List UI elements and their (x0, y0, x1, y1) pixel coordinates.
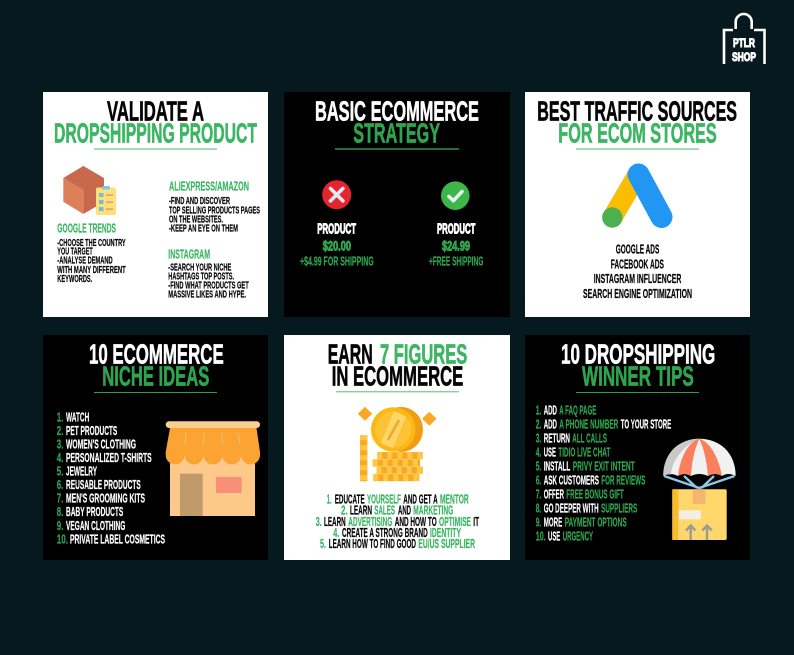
list: seven figure steps: LEARN HOW TO FIND GOOD (329, 536, 416, 551)
list: niche ideas: 6. (57, 477, 63, 492)
heading: 7 figures: IN ECOMMERCE (332, 361, 463, 392)
panel: basic ecommerce strategy (284, 92, 510, 317)
heading: niche ideas (89, 339, 224, 393)
list: winner tips: 8. (536, 501, 541, 516)
list: seven figure steps: AND GET A (403, 491, 438, 506)
logo: PTLR Shop: SHOP (732, 50, 756, 64)
list: winner tips: A FAQ PAGE (559, 403, 596, 418)
list: winner tips: ASK CUSTOMERS (544, 473, 599, 488)
list: winner tips: SUPPLIERS (601, 501, 637, 516)
list: winner tips: PAYMENT OPTIONS (565, 515, 627, 530)
icon: google ads logo (602, 174, 662, 228)
list: seven figure steps: ADVERTISING (348, 514, 392, 529)
text block: instagram: HASHTAGS TOP POSTS. (168, 271, 234, 282)
list: winner tips: OFFER (544, 487, 564, 502)
list: winner tips: ALL CALLS (572, 431, 607, 446)
list: seven figure steps: IDENTITY (430, 525, 461, 540)
offer: product at 20.00: $20.00 (323, 238, 351, 254)
list: niche ideas: 8. (57, 504, 63, 519)
offer: product at 24.99: PRODUCT (437, 222, 475, 238)
heading: traffic sources (537, 96, 737, 150)
heading: 7 figures: EARN (328, 339, 373, 370)
logo: PTLR Shop: PTLR (733, 36, 755, 50)
heading: strategy (315, 96, 479, 150)
heading: validate: DROPSHIPPING PRODUCT (54, 117, 257, 148)
list: niche ideas: MEN'S GROOMING KITS (66, 491, 145, 506)
list: seven figure steps: 1. (327, 491, 332, 506)
panel: earn 7 figures (284, 335, 510, 560)
offer: product at 20.00: +$4.99 FOR SHIPPING (300, 255, 374, 269)
list: niche ideas: 2. (57, 423, 63, 438)
text block: aliexpress amazon: ALIEXPRESS/AMAZON (169, 180, 249, 194)
panel: 10 ecommerce niche ideas (43, 335, 268, 560)
list: winner tips: PRIVY EXIT INTENT (573, 459, 635, 474)
list: niche ideas: 10. (57, 531, 68, 546)
list: niche ideas: JEWELRY (66, 464, 97, 478)
list: niche ideas: 1. (57, 409, 63, 424)
list: traffic sources (583, 242, 692, 301)
heading: validate: VALIDATE A (107, 96, 204, 127)
list: winner tips: 3. (536, 431, 541, 446)
list: winner tips (536, 403, 671, 544)
text block: instagram: INSTAGRAM (168, 247, 210, 261)
heading: strategy: STRATEGY (353, 118, 440, 149)
list: seven figure steps: EDUCATE (335, 491, 365, 506)
icon: shop (166, 421, 260, 516)
offer: product at 24.99 (429, 222, 483, 269)
text block: aliexpress amazon: TOP SELLING PRODUCTS PAGES (169, 205, 260, 216)
list: seven figure steps: 2. (341, 503, 348, 518)
list: winner tips: USE (548, 529, 560, 544)
list: seven figure steps: OPTIMISE (439, 514, 471, 529)
text block: aliexpress amazon: ON THE WEBSITES. (169, 214, 223, 225)
list: seven figure steps: AND HOW TO (395, 514, 437, 529)
list: seven figure steps: MARKETING (413, 503, 453, 518)
list: niche ideas: WATCH (66, 409, 89, 424)
list: seven figure steps: 3. (316, 514, 322, 529)
list: niche ideas: PRIVATE LABEL COSMETICS (70, 531, 165, 546)
list: winner tips: A PHONE NUMBER (559, 417, 619, 432)
list: niche ideas: 9. (57, 518, 63, 533)
list: winner tips: TIDIO LIVE CHAT (558, 445, 610, 460)
icon: green check (441, 181, 470, 210)
list: seven figure steps: CREATE A STRONG BRAND (342, 525, 428, 540)
list: seven figure steps: SALES (374, 503, 395, 518)
list: niche ideas: 7. (57, 491, 63, 506)
list: seven figure steps: AND (398, 503, 411, 518)
heading: winner tips: WINNER TIPS (582, 361, 694, 392)
offer: product at 20.00: PRODUCT (317, 222, 356, 238)
offer: product at 24.99: $24.99 (442, 238, 470, 254)
list: niche ideas: BABY PRODUCTS (66, 504, 123, 519)
list: seven figure steps: YOURSELF (367, 491, 401, 506)
list: winner tips: 5. (536, 459, 541, 474)
list: winner tips: 2. (536, 417, 541, 432)
list: winner tips: 7. (536, 487, 541, 502)
panel: 10 dropshipping winner tips (525, 335, 750, 560)
icon: gold coins (358, 407, 436, 481)
icon: red cross (322, 180, 351, 209)
list: winner tips: FREE BONUS GIFT (566, 487, 624, 502)
list: niche ideas: 3. (57, 436, 63, 451)
list: seven figure steps: MENTOR (440, 491, 469, 506)
list: seven figure steps: 5. (320, 536, 326, 551)
panel: earn 7 figures: IT (473, 514, 479, 529)
heading: niche ideas: 10 ECOMMERCE (89, 339, 224, 370)
list: winner tips: ADD (544, 403, 557, 418)
list: winner tips: GO DEEPER WITH (544, 501, 599, 516)
list: niche ideas: 5. (57, 464, 63, 478)
heading: winner tips (561, 339, 715, 393)
text block: google trends: WITH MANY DIFFERENT (57, 265, 126, 276)
list: winner tips: URGENCY (563, 529, 593, 544)
list: winner tips: 10. (536, 529, 546, 544)
list: seven figure steps: 4. (333, 525, 339, 540)
heading: 7 figures: 7 FIGURES (380, 339, 467, 370)
text block: instagram: MASSIVE LIKES AND HYPE. (168, 289, 246, 300)
panel: 10 dropshipping winner tips: TO YOUR STORE (621, 417, 671, 432)
list: niche ideas: WOMEN'S CLOTHING (66, 436, 136, 451)
list: winner tips: FOR REVIEWS (601, 473, 645, 488)
list: winner tips: RETURN (544, 431, 570, 446)
text block: google trends: -ANALYSE DEMAND (57, 256, 113, 267)
list: traffic sources: FACEBOOK ADS (611, 256, 664, 271)
text block: instagram: -FIND WHAT PRODUCTS GET (168, 280, 249, 291)
list: winner tips: 9. (536, 515, 541, 530)
list: niche ideas: REUSABLE PRODUCTS (66, 477, 141, 492)
text block: aliexpress amazon (169, 180, 260, 234)
panel: best traffic sources (525, 92, 750, 317)
list: seven figure steps: LEARN (350, 503, 372, 518)
logo: PTLR Shop (724, 14, 764, 64)
text block: aliexpress amazon: -KEEP AN EYE ON THEM (169, 223, 238, 234)
heading: 7 figures (328, 339, 467, 392)
offer: product at 20.00 (300, 222, 374, 269)
list: winner tips: USE (544, 445, 556, 460)
heading: niche ideas: NICHE IDEAS (102, 361, 209, 392)
offer: product at 24.99: +FREE SHIPPING (429, 255, 483, 269)
list: niche ideas: 4. (57, 450, 63, 465)
list: niche ideas: VEGAN CLOTHING (66, 518, 125, 533)
text block: instagram (168, 247, 249, 300)
list: traffic sources: INSTAGRAM INFLUENCER (594, 271, 682, 286)
list: winner tips: 1. (536, 403, 541, 418)
text block: google trends: YOU TARGET (57, 247, 93, 258)
panel: validate a dropshipping product (43, 92, 268, 317)
icon: parachute box (663, 439, 736, 540)
list: traffic sources: GOOGLE ADS (616, 242, 659, 257)
list: seven figure steps (316, 491, 479, 551)
list: winner tips: INSTALL (544, 459, 570, 474)
list: seven figure steps: EU/US SUPPLIER (418, 536, 475, 551)
list: niche ideas: PERSONALIZED T-SHIRTS (66, 450, 152, 465)
list: niche ideas: PET PRODUCTS (66, 423, 117, 438)
text block: google trends (57, 222, 126, 285)
text block: google trends: -CHOOSE THE COUNTRY (57, 238, 126, 249)
text block: google trends: GOOGLE TRENDS (57, 222, 116, 236)
list: winner tips: 6. (536, 473, 541, 488)
heading: validate (54, 96, 257, 150)
icon: box with checklist (63, 166, 116, 215)
list: winner tips: 4. (536, 445, 541, 460)
list: winner tips: MORE (544, 515, 562, 530)
heading: strategy: BASIC ECOMMERCE (315, 96, 479, 127)
text block: instagram: -SEARCH YOUR NICHE (168, 262, 231, 273)
list: traffic sources: SEARCH ENGINE OPTIMIZATION (583, 286, 692, 301)
list: niche ideas (57, 409, 165, 546)
text block: aliexpress amazon: -FIND AND DISCOVER (169, 196, 230, 207)
text block: google trends: KEYWORDS. (57, 274, 92, 285)
list: winner tips: ADD (544, 417, 557, 432)
list: seven figure steps: LEARN (324, 514, 346, 529)
